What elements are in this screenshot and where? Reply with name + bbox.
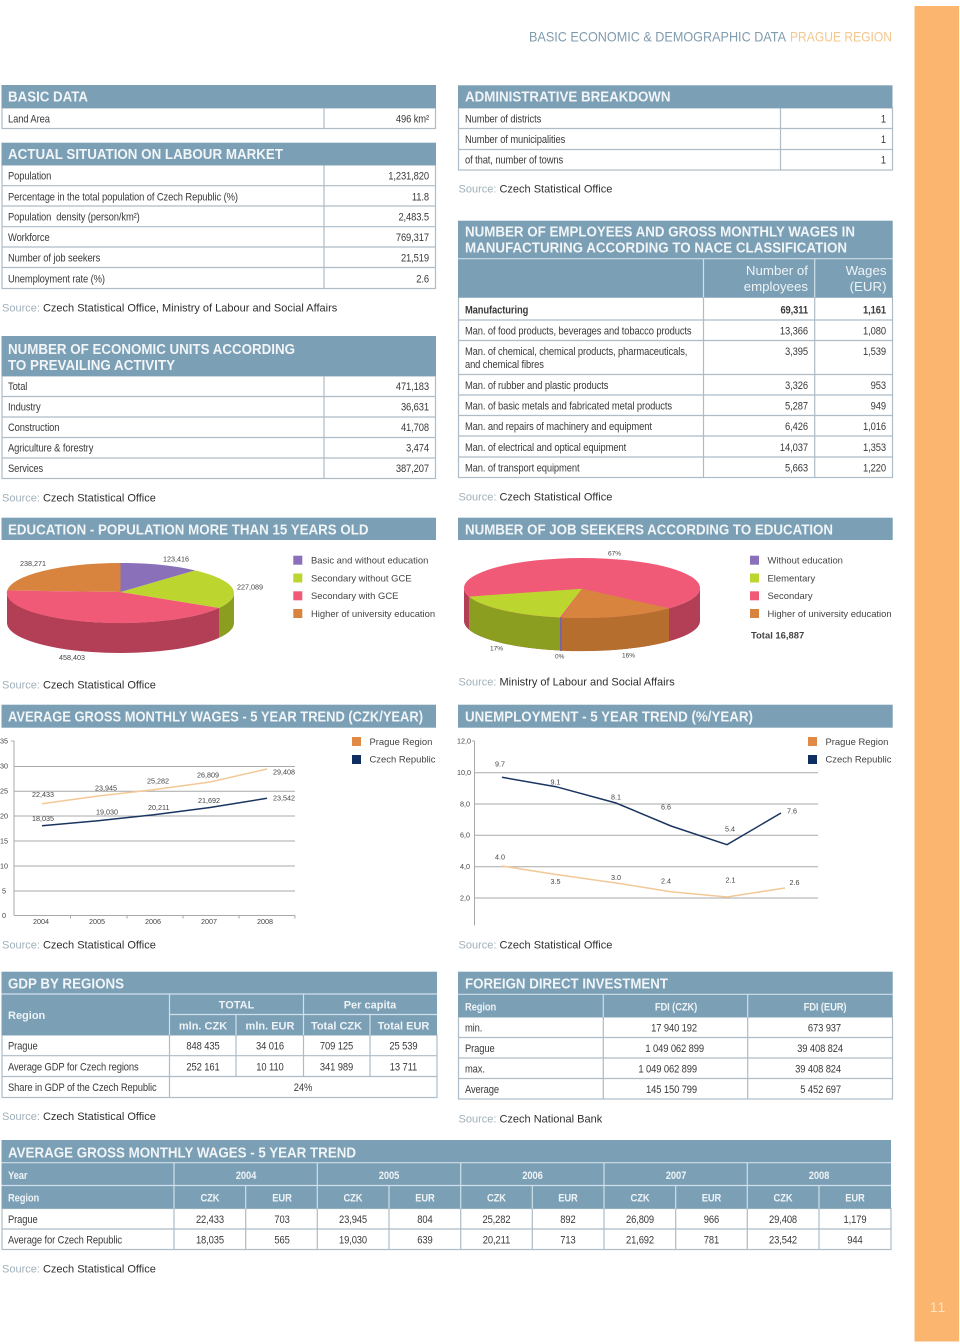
table rows: economic units: Industry bbox=[8, 402, 41, 414]
table rows: wages table: 781 bbox=[704, 1235, 719, 1247]
legend: education: Higher of university education bbox=[311, 608, 435, 619]
pie chart: job seekers bbox=[464, 550, 700, 660]
panel: economic units bbox=[2, 336, 436, 478]
line chart: wages: 19,030 bbox=[96, 808, 118, 816]
table rows: GDP: 24% bbox=[294, 1082, 312, 1094]
table rows: FDI: 5 452 697 bbox=[800, 1084, 841, 1096]
source: employees and wages: Source: Czech Statistical Office bbox=[458, 492, 612, 504]
table rows: wages table: 703 bbox=[274, 1214, 290, 1226]
legend: wages trend: Czech Republic bbox=[370, 754, 436, 764]
side band: orange page edge bbox=[914, 6, 959, 1342]
table rows: labour market: 1,231,820 bbox=[388, 171, 429, 183]
table rows: labour market: 2,483.5 bbox=[398, 212, 429, 224]
pie chart: job seekers: 16% bbox=[622, 652, 635, 660]
table rows: employees and wages: 1,353 bbox=[863, 442, 886, 454]
table rows: FDI bbox=[465, 1002, 846, 1096]
table rows: GDP: 34 016 bbox=[256, 1041, 284, 1053]
table rows: wages table: 2004 bbox=[236, 1170, 257, 1182]
line chart: wages: 5 bbox=[2, 886, 6, 896]
table rows: economic units: Agriculture & forestry bbox=[8, 443, 94, 455]
panel: wages trend line chart bbox=[0, 705, 436, 926]
table rows: employees and wages: Man. of transport equipment bbox=[465, 463, 580, 475]
table rows: labour market: Number of job seekers bbox=[8, 253, 100, 265]
table rows: labour market: 11.8 bbox=[412, 192, 429, 204]
panel: wages five year table bbox=[2, 1140, 891, 1250]
table rows: wages table: 22,433 bbox=[196, 1214, 224, 1226]
table rows: wages table: 21,692 bbox=[626, 1235, 654, 1247]
heading: GDP: GDP BY REGIONS bbox=[8, 976, 124, 992]
line chart: unemployment: 4.0 bbox=[495, 852, 505, 862]
table rows: employees and wages: 3,395 bbox=[785, 346, 808, 358]
line chart: wages: 15 bbox=[0, 836, 8, 846]
table rows: wages table: 29,408 bbox=[769, 1214, 797, 1226]
table rows: FDI: Prague bbox=[465, 1043, 495, 1055]
table rows: economic units: 36,631 bbox=[401, 402, 429, 414]
pie chart: job seekers: 17% bbox=[490, 646, 503, 652]
line chart: wages: 20 bbox=[0, 812, 8, 820]
heading: economic units: NUMBER OF ECONOMIC UNITS ACCORDING bbox=[8, 342, 295, 358]
line chart: wages: 10 bbox=[0, 862, 8, 870]
table rows: labour market: Percentage in the total population of Czech Republic (%) bbox=[8, 192, 238, 204]
panel: job seekers pie bbox=[458, 518, 893, 660]
table rows: wages table: EUR bbox=[558, 1193, 578, 1205]
panel: basic data bbox=[2, 85, 436, 128]
line chart: wages: 18,035 bbox=[32, 814, 54, 823]
pie chart: job seekers: 67% bbox=[608, 550, 621, 558]
line chart: unemployment: 2,0 bbox=[460, 894, 470, 902]
table rows: GDP: 848 435 bbox=[186, 1041, 220, 1053]
panel: foreign direct investment bbox=[458, 972, 893, 1099]
heading: employees and wages: MANUFACTURING ACCORDING TO NACE CLASSIFICATION bbox=[465, 241, 847, 257]
column headers: GDP: Per capita bbox=[344, 1000, 397, 1012]
column headers: GDP: Total EUR bbox=[378, 1020, 429, 1032]
table rows: labour market: Workforce bbox=[8, 232, 50, 244]
heading: administrative breakdown: ADMINISTRATIVE BREAKDOWN bbox=[465, 90, 670, 106]
line chart: unemployment: 9.1 bbox=[550, 778, 560, 786]
table rows: employees and wages: and chemical fibres bbox=[465, 359, 544, 371]
line chart: wages: 23,945 bbox=[95, 784, 117, 792]
line chart: unemployment: 12,0 bbox=[457, 736, 471, 746]
table rows: economic units: 41,708 bbox=[401, 422, 429, 434]
table rows: employees and wages bbox=[465, 305, 886, 475]
heading: job seekers: NUMBER OF JOB SEEKERS ACCORDING TO EDUCATION bbox=[465, 522, 833, 538]
table rows: FDI: 673 937 bbox=[808, 1023, 841, 1035]
table rows: GDP: 25 539 bbox=[389, 1041, 418, 1053]
heading: basic data: BASIC DATA bbox=[8, 90, 88, 106]
legend: job seekers bbox=[750, 554, 892, 640]
table rows: administrative breakdown: 1 bbox=[881, 114, 886, 126]
table rows: labour market: 769,317 bbox=[396, 232, 429, 244]
legend: job seekers: Secondary bbox=[768, 590, 813, 601]
heading: wages table: AVERAGE GROSS MONTHLY WAGES - 5 YEAR TREND bbox=[8, 1145, 356, 1161]
column header: number of employees: Number of bbox=[746, 263, 808, 278]
table rows: wages table: CZK bbox=[344, 1193, 363, 1205]
line chart: unemployment: 2.4 bbox=[661, 876, 671, 886]
table rows: GDP: Average GDP for Czech regions bbox=[8, 1062, 139, 1074]
table rows: FDI: Average bbox=[465, 1084, 499, 1096]
heading: wages trend: AVERAGE GROSS MONTHLY WAGES - 5 YEAR TREND (CZK/YEAR) bbox=[8, 710, 423, 726]
table rows: wages table: EUR bbox=[272, 1193, 292, 1205]
table rows: wages table: Year bbox=[8, 1170, 27, 1182]
table rows: GDP bbox=[8, 1041, 418, 1094]
table rows: employees and wages: Man. of chemical, chemical products, pharmaceuticals, bbox=[465, 346, 687, 358]
table rows: wages table: 19,030 bbox=[339, 1235, 367, 1247]
column header: number of employees: employees bbox=[744, 279, 808, 294]
table rows: economic units: 3,474 bbox=[406, 443, 429, 455]
table rows: labour market bbox=[8, 171, 429, 286]
row: land area bbox=[8, 114, 430, 126]
table rows: wages table bbox=[8, 1170, 867, 1247]
legend: job seekers: Higher of university education bbox=[768, 608, 892, 619]
column headers: GDP: TOTAL bbox=[219, 1000, 255, 1012]
heading: FDI: FOREIGN DIRECT INVESTMENT bbox=[465, 976, 668, 992]
table rows: GDP: 341 989 bbox=[320, 1062, 353, 1074]
legend: job seekers: Total 16,887 bbox=[751, 630, 804, 640]
line chart: unemployment: 10,0 bbox=[457, 768, 471, 777]
panel: unemployment line chart bbox=[457, 705, 893, 926]
table rows: wages table: Average for Czech Republic bbox=[8, 1235, 122, 1247]
table rows: economic units: 387,207 bbox=[396, 463, 429, 475]
legend: wages trend: Prague Region bbox=[370, 736, 432, 747]
table rows: administrative breakdown: 1 bbox=[881, 134, 886, 146]
heading: labour market: ACTUAL SITUATION ON LABOUR MARKET bbox=[8, 147, 283, 163]
line chart: wages bbox=[0, 736, 295, 926]
table rows: employees and wages: 1,016 bbox=[863, 421, 886, 433]
table rows: FDI: 39 408 824 bbox=[795, 1064, 841, 1076]
legend: unemployment bbox=[808, 736, 892, 764]
source: administrative breakdown: Source: Czech Statistical Office bbox=[458, 184, 612, 196]
panel: labour market bbox=[2, 143, 436, 288]
table rows: wages table: 26,809 bbox=[626, 1214, 654, 1226]
source: GDP: Source: Czech Statistical Office bbox=[2, 1111, 156, 1123]
source: wages trend: Source: Czech Statistical Office bbox=[2, 939, 156, 951]
pie chart: education: 238,271 bbox=[20, 559, 46, 568]
table rows: wages table: 1,179 bbox=[844, 1214, 867, 1226]
line chart: wages: 0 bbox=[2, 911, 6, 920]
legend: job seekers: Elementary bbox=[768, 572, 815, 583]
panel: GDP by regions bbox=[2, 972, 437, 1098]
row: land area: 496 km² bbox=[396, 114, 430, 126]
table rows: wages table: CZK bbox=[201, 1193, 220, 1205]
line chart: wages: 2007 bbox=[201, 917, 217, 926]
source: job seekers: Source: Ministry of Labour and Social Affairs bbox=[458, 677, 675, 689]
table rows: employees and wages: 1,220 bbox=[863, 463, 886, 475]
table rows: wages table: Prague bbox=[8, 1214, 38, 1226]
table rows: GDP: 13 711 bbox=[390, 1062, 417, 1074]
heading: unemployment: UNEMPLOYMENT - 5 YEAR TREND (%/YEAR) bbox=[465, 710, 753, 726]
table rows: employees and wages: 13,366 bbox=[780, 326, 808, 338]
line chart: unemployment: 5.4 bbox=[725, 824, 735, 834]
line chart: wages: 2005 bbox=[89, 917, 105, 926]
table rows: FDI: max. bbox=[465, 1064, 485, 1076]
line chart: unemployment: 8.1 bbox=[611, 792, 621, 802]
pie chart: education bbox=[7, 554, 263, 662]
line chart: wages: 26,809 bbox=[197, 770, 219, 780]
table rows: employees and wages: 949 bbox=[871, 401, 886, 413]
page title: PRAGUE REGION bbox=[790, 28, 892, 44]
table rows: GDP: 709 125 bbox=[320, 1041, 353, 1053]
table rows: employees and wages: 5,287 bbox=[785, 401, 808, 413]
panel: administrative breakdown bbox=[458, 85, 892, 170]
source: labour market: Source: Czech Statistical Office, Ministry of Labour and Social Affairs bbox=[2, 303, 338, 315]
column header: wages: (EUR) bbox=[850, 279, 886, 294]
table rows: wages table: 23,542 bbox=[769, 1235, 797, 1247]
table rows: economic units: Construction bbox=[8, 422, 60, 434]
legend: education: Secondary without GCE bbox=[311, 572, 412, 583]
line chart: wages: 30 bbox=[0, 762, 8, 770]
line chart: wages: 25 bbox=[0, 786, 8, 796]
table rows: labour market: 21,519 bbox=[401, 253, 429, 265]
heading: employees and wages bbox=[465, 225, 855, 257]
table rows: employees and wages: 69,311 bbox=[780, 305, 808, 317]
line chart: unemployment bbox=[457, 736, 818, 926]
table rows: GDP: Share in GDP of the Czech Republic bbox=[8, 1082, 157, 1094]
legend: job seekers: Without education bbox=[768, 554, 843, 566]
table rows: wages table: 25,282 bbox=[482, 1214, 511, 1226]
table rows: administrative breakdown: Number of municipalities bbox=[465, 134, 565, 146]
table rows: employees and wages: Manufacturing bbox=[465, 305, 528, 317]
line chart: wages: 21,692 bbox=[198, 796, 220, 805]
table rows: wages table: 18,035 bbox=[196, 1235, 224, 1247]
column headers: GDP: Region bbox=[8, 1010, 46, 1022]
column header: wages: Wages bbox=[846, 263, 886, 278]
table rows: administrative breakdown: Number of districts bbox=[465, 114, 541, 126]
line chart: wages: 35 bbox=[0, 736, 8, 746]
line chart: unemployment: 7.6 bbox=[787, 806, 797, 816]
table rows: wages table: 23,945 bbox=[339, 1214, 367, 1226]
table rows: employees and wages: 5,663 bbox=[785, 463, 808, 475]
table rows: employees and wages: Man. of rubber and plastic products bbox=[465, 380, 608, 392]
table rows: FDI: min. bbox=[465, 1023, 482, 1035]
table rows: FDI: FDI (EUR) bbox=[804, 1002, 846, 1014]
heading: economic units bbox=[8, 342, 295, 374]
table rows: wages table: EUR bbox=[845, 1193, 865, 1205]
line chart: wages: 2006 bbox=[145, 917, 161, 926]
panel: education pie bbox=[2, 518, 436, 662]
source: unemployment: Source: Czech Statistical Office bbox=[458, 939, 612, 951]
table rows: economic units: Services bbox=[8, 463, 43, 475]
table rows: FDI: 145 150 799 bbox=[646, 1084, 697, 1096]
table rows: FDI: FDI (CZK) bbox=[655, 1002, 697, 1014]
table rows: wages table: 804 bbox=[417, 1214, 433, 1226]
table rows: wages table: 966 bbox=[704, 1214, 719, 1226]
table rows: wages table: 20,211 bbox=[483, 1235, 510, 1247]
line chart: wages: 2004 bbox=[33, 917, 49, 926]
table rows: labour market: Population bbox=[8, 171, 52, 183]
table rows: wages table: EUR bbox=[415, 1193, 435, 1205]
source: economic units: Source: Czech Statistical Office bbox=[2, 493, 156, 505]
table rows: employees and wages: Man. of food products, beverages and tobacco products bbox=[465, 326, 692, 338]
pie chart: job seekers: 0% bbox=[555, 654, 565, 660]
legend: unemployment: Czech Republic bbox=[826, 754, 892, 764]
source: wages table: Source: Czech Statistical Office bbox=[2, 1263, 156, 1275]
table rows: labour market: 2.6 bbox=[416, 274, 429, 286]
table rows: wages table: CZK bbox=[487, 1193, 507, 1205]
table rows: wages table: 2008 bbox=[809, 1170, 829, 1182]
table rows: wages table: 713 bbox=[560, 1235, 576, 1247]
table rows: wages table: 565 bbox=[274, 1235, 290, 1247]
pie chart: education: 123,416 bbox=[163, 554, 189, 564]
heading: employees and wages: NUMBER OF EMPLOYEES AND GROSS MONTHLY WAGES IN bbox=[465, 225, 855, 241]
table rows: administrative breakdown: of that, number of towns bbox=[465, 155, 563, 167]
heading: economic units: TO PREVAILING ACTIVITY bbox=[8, 358, 175, 374]
page title: BASIC ECONOMIC & DEMOGRAPHIC DATA bbox=[529, 28, 787, 44]
line chart: unemployment: 9.7 bbox=[495, 760, 505, 768]
line chart: unemployment: 2.6 bbox=[790, 878, 800, 887]
table rows: employees and wages: 6,426 bbox=[785, 421, 808, 433]
line chart: wages: 20,211 bbox=[148, 803, 169, 812]
line chart: unemployment: 6.6 bbox=[661, 802, 671, 812]
table rows: wages table: CZK bbox=[774, 1193, 793, 1205]
source: FDI: Source: Czech National Bank bbox=[458, 1114, 603, 1126]
table rows: economic units: 471,183 bbox=[396, 381, 429, 393]
table rows: wages table: Region bbox=[8, 1193, 39, 1205]
column headers: GDP: mln. CZK bbox=[179, 1020, 227, 1032]
table rows: GDP: 252 161 bbox=[186, 1062, 220, 1074]
table rows: labour market: Population density (person/km²) bbox=[8, 212, 140, 224]
table rows: administrative breakdown bbox=[465, 114, 886, 167]
source: education: Source: Czech Statistical Office bbox=[2, 679, 156, 691]
table rows: employees and wages: Man. and repairs of machinery and equipment bbox=[465, 421, 652, 433]
line chart: unemployment: 2.1 bbox=[726, 876, 736, 884]
table rows: administrative breakdown: 1 bbox=[881, 155, 886, 167]
table rows: wages table: 2007 bbox=[666, 1170, 687, 1182]
table rows: employees and wages: Man. of electrical and optical equipment bbox=[465, 442, 626, 454]
line chart: wages: 25,282 bbox=[147, 776, 169, 786]
line chart: unemployment: 4,0 bbox=[460, 862, 470, 871]
table rows: wages table: 2005 bbox=[379, 1170, 400, 1182]
table rows: wages table: CZK bbox=[631, 1193, 650, 1205]
line chart: unemployment: 3.0 bbox=[611, 873, 621, 882]
line chart: unemployment: 6,0 bbox=[460, 830, 470, 840]
table rows: GDP: 10 110 bbox=[256, 1062, 284, 1074]
table rows: economic units bbox=[8, 381, 429, 475]
table rows: employees and wages: 953 bbox=[871, 380, 886, 392]
table rows: economic units: Total bbox=[8, 381, 27, 393]
heading: education: EDUCATION - POPULATION MORE THAN 15 YEARS OLD bbox=[8, 522, 368, 538]
line chart: wages: 23,542 bbox=[273, 794, 295, 802]
table rows: employees and wages: Man. of basic metals and fabricated metal products bbox=[465, 401, 672, 413]
panel: employees and wages bbox=[458, 221, 893, 477]
page number: 11 bbox=[930, 1299, 946, 1315]
legend: education: Secondary with GCE bbox=[311, 590, 398, 601]
table rows: labour market: Unemployment rate (%) bbox=[8, 274, 105, 286]
table rows: wages table: 892 bbox=[560, 1214, 576, 1226]
table rows: FDI: 1 049 062 899 bbox=[638, 1064, 697, 1076]
table rows: wages table: 639 bbox=[417, 1235, 433, 1247]
table rows: FDI: Region bbox=[465, 1002, 496, 1014]
table rows: employees and wages: 1,080 bbox=[863, 326, 886, 338]
legend: unemployment: Prague Region bbox=[826, 736, 888, 747]
legend: education bbox=[293, 554, 435, 619]
table rows: employees and wages: 1,539 bbox=[863, 346, 886, 358]
table rows: FDI: 17 940 192 bbox=[651, 1023, 697, 1035]
table rows: employees and wages: 1,161 bbox=[863, 305, 886, 317]
line chart: unemployment: 8,0 bbox=[460, 800, 470, 808]
table rows: employees and wages: 3,326 bbox=[785, 380, 808, 392]
row: land area: Land Area bbox=[8, 114, 50, 126]
table rows: wages table: 944 bbox=[847, 1235, 863, 1247]
table rows: employees and wages: 14,037 bbox=[780, 442, 808, 454]
table rows: FDI: 39 408 824 bbox=[797, 1043, 843, 1055]
column headers: GDP: mln. EUR bbox=[246, 1020, 294, 1032]
legend: wages trend bbox=[352, 736, 436, 764]
legend: education: Basic and without education bbox=[311, 554, 428, 566]
line chart: wages: 22,433 bbox=[32, 790, 54, 799]
line chart: unemployment: 3.5 bbox=[550, 877, 560, 886]
table rows: GDP: Prague bbox=[8, 1041, 38, 1053]
line chart: wages: 29,408 bbox=[273, 768, 295, 776]
pie chart: education: 458,403 bbox=[59, 653, 85, 662]
table rows: wages table: 2006 bbox=[522, 1170, 543, 1182]
line chart: wages: 2008 bbox=[257, 917, 273, 926]
pie chart: education: 227,089 bbox=[237, 582, 263, 592]
column headers: GDP bbox=[8, 1000, 429, 1032]
column headers: GDP: Total CZK bbox=[311, 1020, 362, 1032]
table rows: FDI: 1 049 062 899 bbox=[645, 1043, 704, 1055]
table rows: wages table: EUR bbox=[702, 1193, 722, 1205]
